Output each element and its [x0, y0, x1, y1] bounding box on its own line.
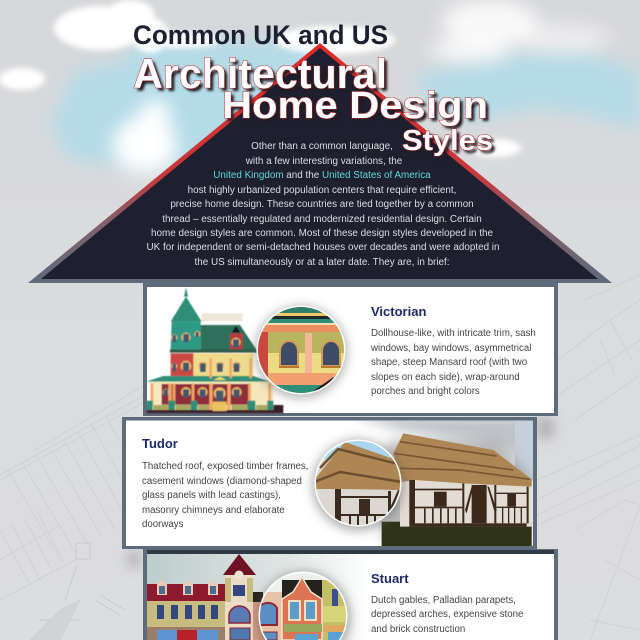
icon: Stuart facade detail — [257, 571, 351, 640]
intro text: with a few interesting variations, the — [245, 156, 403, 167]
text: Victorian description — [370, 328, 536, 397]
panel: Victorian — [143, 283, 558, 416]
text: Tudor description: Thatched roof, exposed timber frames, — [142, 461, 308, 472]
text: Tudor description: masonry chimneys and elaborate — [142, 505, 285, 516]
illustration: Stuart townhouses — [147, 554, 372, 640]
intro text: Other than a common language, — [251, 141, 393, 152]
intro text — [146, 141, 500, 268]
title line: Architectural: Architectural — [136, 53, 390, 100]
intro text: the US simultaneously or at a later date. They are, in brief: — [194, 257, 450, 268]
title line: Home Design: Home Design — [222, 85, 488, 127]
heading: Tudor: Tudor — [142, 436, 178, 451]
panel: Stuart — [143, 549, 558, 640]
text: Tudor description: casement windows (diamond-shaped — [142, 476, 302, 487]
icon: Victorian window detail — [255, 305, 348, 398]
text: Victorian description: slopes on each side), wrap-around — [371, 372, 520, 383]
intro text: host highly urbanized population centers that require efficient, — [188, 185, 456, 196]
text: Stuart description — [371, 595, 523, 635]
text: Victorian description: porches and bright colors — [371, 386, 480, 397]
intro text: thread – essentially regulated and modernized residential design. Certain — [162, 214, 482, 225]
text: Tudor description — [142, 461, 308, 530]
intro text: home design styles are common. Most of these design styles developed in the — [151, 228, 493, 239]
title line: Home Design: Home Design — [225, 88, 491, 130]
text: Stuart description: and brick construction — [371, 624, 465, 635]
icon: Tudor roof detail — [312, 439, 404, 531]
text: Stuart description: depressed arches, expensive stone — [371, 609, 523, 620]
text: Victorian description: shape, steep Mansard roof (with two — [371, 357, 527, 368]
text: Victorian description: Dollhouse-like, with intricate trim, sash — [371, 328, 536, 339]
intro text: United Kingdom and the United States of America — [213, 170, 431, 181]
shadows cast by panels — [128, 418, 553, 567]
blueprint drawings — [0, 275, 640, 640]
panel: Tudor — [122, 415, 540, 549]
illustration: Tudor cottage — [358, 420, 533, 546]
text: Tudor description: doorways — [142, 519, 184, 530]
intro text: UK for independent or semi-detached houses over decades and were adopted in — [146, 242, 500, 253]
text: Victorian description: windows, bay windows, asymmetrical — [370, 343, 531, 354]
title line: Common UK and US: Common UK and US — [133, 20, 388, 50]
text: Tudor description: glass panels with lead castings), — [142, 490, 281, 501]
illustration: Victorian house — [146, 287, 283, 413]
intro text: precise home design. These countries are tied together by a common — [170, 199, 474, 210]
roof — [28, 43, 612, 283]
title line: Styles: Styles — [405, 128, 496, 160]
text: Stuart description: Dutch gables, Palladian parapets, — [371, 595, 516, 606]
title — [133, 20, 496, 160]
title line: Styles: Styles — [402, 125, 493, 157]
heading: Stuart: Stuart — [371, 571, 409, 586]
title line: Architectural: Architectural — [133, 50, 387, 97]
heading: Victorian: Victorian — [371, 304, 426, 319]
